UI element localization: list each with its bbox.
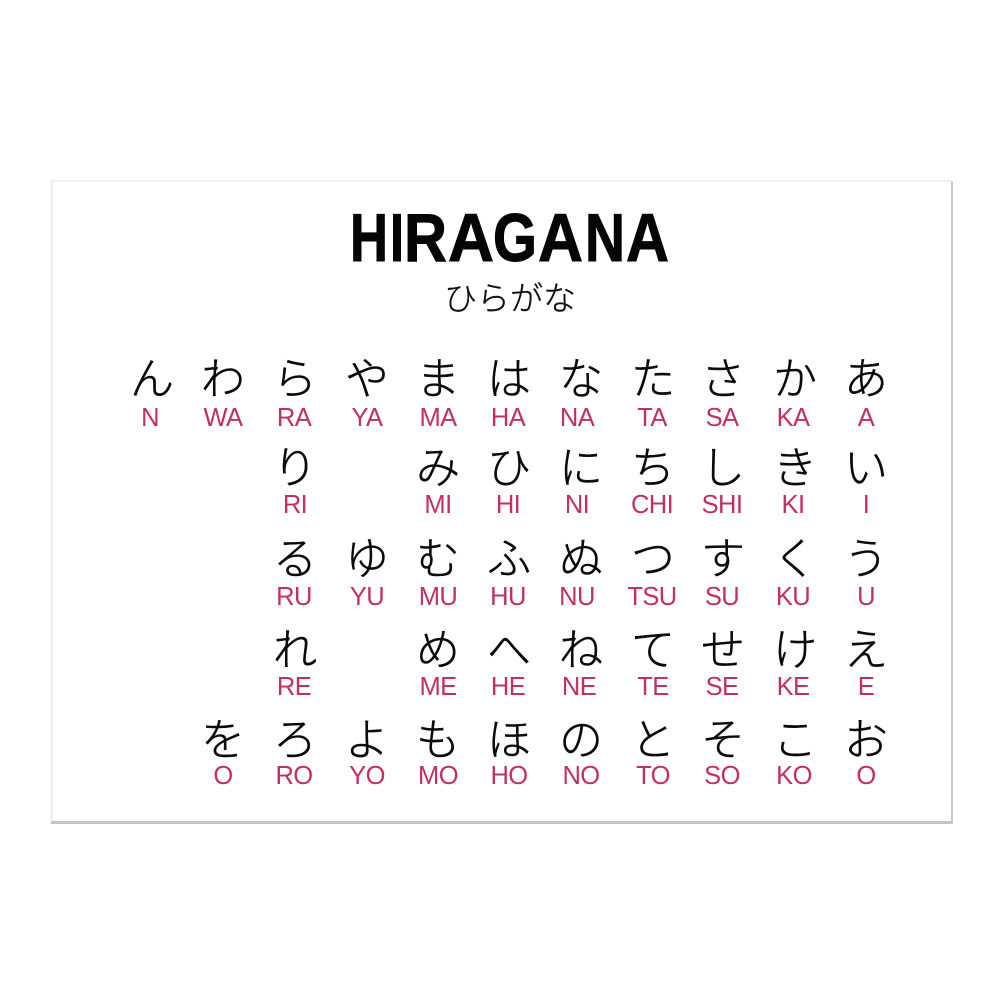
row 2: i-column kana: SHI — [702, 491, 742, 519]
row 4: e-column kana: NE — [562, 673, 596, 701]
row 2: i-column kana: NI — [565, 491, 589, 519]
row 5: o-column kana: NO — [562, 762, 600, 790]
row 4: e-column kana: TE — [637, 673, 669, 701]
row 4: e-column kana: E — [858, 673, 874, 701]
row 5: o-column kana: HO — [490, 762, 528, 790]
title — [350, 200, 669, 276]
subtitle: ひらがな — [444, 280, 576, 317]
row 3: u-column kana: ゆ — [345, 535, 389, 584]
row 3: u-column kana: TSU — [627, 583, 677, 611]
row 4: e-column kana: ね — [559, 626, 603, 675]
row 1: a-column kana: ま — [416, 355, 460, 404]
row 2: i-column kana — [273, 444, 888, 519]
row 2: i-column kana: KI — [782, 491, 804, 519]
row 5: o-column kana: ろ — [273, 716, 317, 765]
row 1: a-column kana: た — [631, 355, 675, 404]
row 3: u-column kana: SU — [705, 583, 739, 611]
row 1: a-column kana: あ — [844, 355, 888, 404]
row 4: e-column kana: せ — [701, 626, 745, 675]
row 5: o-column kana: の — [559, 716, 603, 765]
title: A — [538, 200, 583, 276]
title: R — [404, 200, 447, 276]
row 3: u-column kana: つ — [631, 535, 675, 584]
row 4: e-column kana: れ — [273, 626, 317, 675]
row 2: i-column kana: に — [559, 444, 603, 493]
row 4: e-column kana — [273, 626, 888, 701]
row 3: u-column kana: YU — [350, 583, 384, 611]
row 5: o-column kana: ほ — [487, 716, 531, 765]
row 5: o-column kana: YO — [349, 762, 385, 790]
row 2: i-column kana: い — [844, 444, 888, 493]
row 1: a-column kana: ん — [130, 355, 174, 404]
row 1: a-column kana: KA — [777, 404, 810, 432]
row 4: e-column kana: て — [631, 626, 675, 675]
panel: poster card — [50, 180, 953, 824]
row 2: i-column kana: I — [863, 491, 869, 519]
row 1: a-column kana: わ — [201, 355, 245, 404]
row 3: u-column kana: ふ — [487, 535, 531, 584]
row 1: a-column kana: RA — [277, 404, 312, 432]
row 1: a-column kana: HA — [491, 404, 526, 432]
row 5: o-column kana: そ — [701, 716, 745, 765]
row 2: i-column kana: し — [701, 444, 745, 493]
row 5: o-column kana — [201, 716, 888, 790]
row 4: e-column kana: け — [773, 626, 817, 675]
row 2: i-column kana: MI — [424, 491, 452, 519]
row 1: a-column kana: や — [345, 355, 389, 404]
row 3: u-column kana — [273, 535, 888, 611]
row 3: u-column kana: す — [701, 535, 745, 584]
row 3: u-column kana: MU — [419, 583, 457, 611]
row 5: o-column kana: も — [416, 716, 460, 765]
row 2: i-column kana: CHI — [631, 491, 673, 519]
row 1: a-column kana: YA — [352, 404, 383, 432]
row 1: a-column kana: は — [487, 355, 531, 404]
row 5: o-column kana: よ — [345, 716, 389, 765]
row 3: u-column kana: ぬ — [559, 535, 603, 584]
row 5: o-column kana: RO — [275, 762, 313, 790]
row 3: u-column kana: HU — [490, 583, 526, 611]
row 3: u-column kana: む — [416, 535, 460, 584]
row 3: u-column kana: KU — [776, 583, 810, 611]
row 1: a-column kana — [130, 355, 888, 432]
row 1: a-column kana: ら — [273, 355, 317, 404]
row 1: a-column kana: TA — [637, 404, 667, 432]
row 4: e-column kana: KE — [777, 673, 809, 701]
row 2: i-column kana: ひ — [487, 444, 531, 493]
title: A — [626, 200, 669, 276]
row 5: o-column kana: こ — [773, 716, 817, 765]
title: I — [390, 200, 404, 276]
title: H — [350, 200, 388, 276]
row 4: e-column kana: ME — [419, 673, 457, 701]
row 2: i-column kana: き — [773, 444, 817, 493]
row 3: u-column kana: NU — [559, 583, 595, 611]
row 1: a-column kana: WA — [204, 404, 243, 432]
row 4: e-column kana: SE — [706, 673, 738, 701]
row 1: a-column kana: さ — [701, 355, 745, 404]
title: N — [585, 200, 625, 276]
row 5: o-column kana: O — [856, 762, 876, 790]
row 4: e-column kana: え — [844, 626, 888, 675]
row 2: i-column kana: HI — [496, 491, 520, 519]
row 3: u-column kana: U — [857, 583, 875, 611]
row 4: e-column kana: HE — [491, 673, 525, 701]
row 4: e-column kana: め — [416, 626, 460, 675]
row 5: o-column kana: MO — [418, 762, 458, 790]
title: A — [448, 200, 494, 276]
row 2: i-column kana: ち — [631, 444, 675, 493]
row 4: e-column kana: へ — [487, 626, 531, 675]
row 5: o-column kana: SO — [704, 762, 740, 790]
row 3: u-column kana: RU — [276, 583, 312, 611]
row 5: o-column kana: を — [201, 716, 245, 765]
row 5: o-column kana: と — [631, 716, 675, 765]
row 5: o-column kana: KO — [776, 762, 812, 790]
row 3: u-column kana: る — [273, 535, 317, 584]
row 5: o-column kana: O — [213, 762, 233, 790]
row 2: i-column kana: み — [416, 444, 460, 493]
row 2: i-column kana: RI — [283, 491, 307, 519]
row 1: a-column kana: な — [559, 355, 603, 404]
row 4: e-column kana: RE — [277, 673, 311, 701]
row 1: a-column kana: NA — [560, 404, 595, 432]
title: G — [493, 200, 537, 276]
row 5: o-column kana: TO — [636, 762, 670, 790]
row 5: o-column kana: お — [844, 716, 888, 765]
row 2: i-column kana: り — [273, 444, 317, 493]
row 1: a-column kana: A — [858, 404, 875, 432]
row 1: a-column kana: か — [773, 355, 817, 404]
row 1: a-column kana: SA — [706, 404, 739, 432]
row 3: u-column kana: う — [844, 535, 888, 584]
row 1: a-column kana: MA — [419, 404, 457, 432]
row 1: a-column kana: N — [141, 404, 159, 432]
row 3: u-column kana: く — [773, 535, 817, 584]
